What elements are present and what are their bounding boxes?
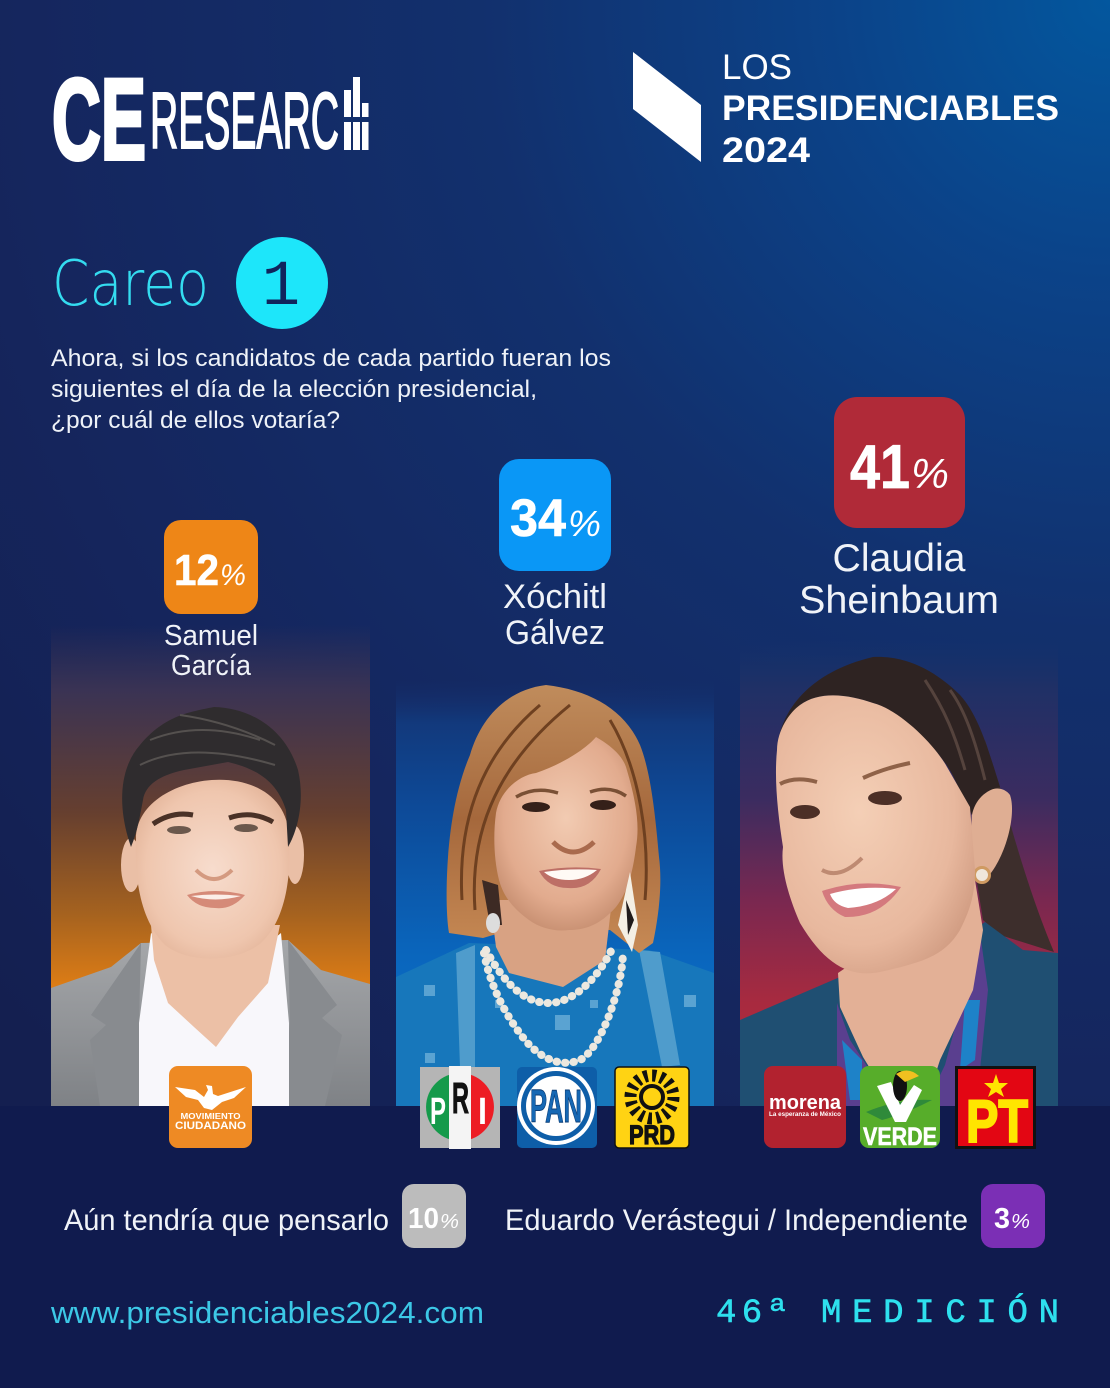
- name: Samuel García: García: [171, 650, 252, 682]
- name: Xóchitl Gálvez: Gálvez: [505, 614, 605, 652]
- logo: CE Research: CE: [52, 56, 146, 184]
- logo: Verde: [860, 1066, 940, 1151]
- name: Claudia Sheinbaum: [799, 537, 999, 622]
- question text: ¿por cuál de ellos votaría?: [51, 407, 340, 434]
- logo wordmark: PRESIDENCIABLES: [722, 89, 1059, 128]
- text: Eduardo Verástegui / Independiente: Eduardo Verástegui / Independiente: [505, 1204, 968, 1237]
- logo: PRI: P: [430, 1091, 446, 1133]
- question text: [51, 345, 611, 434]
- neck: [151, 925, 280, 1047]
- scarf: [837, 933, 988, 1106]
- badge: 34%: [499, 459, 611, 571]
- face: [494, 737, 638, 931]
- badge: 34%: %: [568, 503, 601, 544]
- earrings: [482, 880, 502, 925]
- footer: website: www.presidenciables2024.com: [50, 1295, 484, 1330]
- text: Aún tendría que pensarlo: Aún tendría que pensarlo: [64, 1204, 389, 1237]
- logo: Morena: La esperanza de México: [769, 1111, 841, 1118]
- logo: PT: [955, 1066, 1036, 1155]
- logo: CE Research: [52, 56, 370, 184]
- badge: 41%: [834, 397, 965, 528]
- footer: measurement: MEDICIÓN: [821, 1294, 1059, 1333]
- logo: Morena: [764, 1066, 846, 1148]
- neck and chest: [838, 880, 983, 1068]
- logo: PAN: [517, 1067, 597, 1148]
- name: Claudia Sheinbaum: Claudia: [832, 537, 966, 580]
- name: Samuel García: Samuel: [164, 620, 258, 652]
- name: Samuel García: [164, 620, 258, 682]
- logo: Movimiento Ciudadano: MOVIMIENTO: [180, 1111, 241, 1121]
- badge: 10%: %: [440, 1211, 459, 1233]
- pearl necklaces: [484, 947, 623, 1063]
- logo wordmark: [722, 48, 1059, 170]
- features: [516, 789, 626, 797]
- face: [136, 780, 289, 959]
- name: Xóchitl Gálvez: [503, 578, 607, 652]
- footer: measurement: [716, 1294, 1059, 1333]
- face: [776, 695, 975, 973]
- logo: PRI: I: [478, 1091, 487, 1133]
- badge: 10%: [402, 1184, 466, 1248]
- badge: 12%: [164, 520, 258, 614]
- badge: number 1: 1: [262, 252, 300, 324]
- badge: 10%: 10: [408, 1203, 439, 1235]
- jacket: [51, 940, 370, 1106]
- logo: Verde: VERDE: [863, 1123, 937, 1151]
- heading: Careo: Careo: [52, 247, 209, 320]
- name: Xóchitl Gálvez: Xóchitl: [503, 578, 607, 616]
- logo wordmark: LOS: [722, 48, 792, 87]
- logo: Los Presidenciables 2024: [633, 48, 1059, 170]
- ear: [972, 788, 1012, 874]
- badge: number 1: [236, 237, 328, 329]
- bottom band: [0, 1106, 1110, 1388]
- logo: CE Research: RESEARC: [150, 76, 339, 165]
- neck: [490, 900, 612, 987]
- hair: [122, 707, 301, 847]
- earring: [974, 868, 990, 882]
- hair: [447, 685, 660, 953]
- badge: 3%: %: [1011, 1211, 1030, 1233]
- shirt: [139, 933, 289, 1106]
- hair top: [777, 657, 1000, 815]
- logo: Morena: morena: [769, 1092, 842, 1114]
- logo wordmark: 2024: [722, 131, 811, 170]
- badge: 3%: 3: [994, 1203, 1010, 1235]
- name: Claudia Sheinbaum: Sheinbaum: [799, 579, 999, 622]
- features: [780, 763, 910, 784]
- icon: white chevron mark: [633, 52, 701, 162]
- eyes and mouth: [153, 814, 273, 824]
- logo: PT: PT: [966, 1088, 1028, 1155]
- footer: measurement: 46ª: [716, 1295, 788, 1333]
- jacket: [740, 922, 1058, 1106]
- logo: PRD: PRD: [629, 1120, 675, 1150]
- panel: Claudia Sheinbaum photo: [740, 640, 1058, 1106]
- logo: PRI: [420, 1066, 500, 1149]
- panel: Xóchitl Gálvez photo: [396, 680, 714, 1106]
- question text: siguientes el día de la elección presidencial,: [51, 376, 537, 403]
- badge: 41%: %: [911, 450, 949, 497]
- logo: PRD: [615, 1067, 689, 1150]
- badge: 41%: 41: [850, 433, 910, 502]
- badge: 34%: 34: [510, 489, 566, 548]
- ears: [121, 839, 138, 892]
- badge: 12%: 12: [174, 546, 219, 595]
- badge: 12%: %: [220, 559, 246, 592]
- logo: Movimiento Ciudadano: [169, 1066, 252, 1148]
- logo: PRI: R: [452, 1074, 469, 1123]
- logo: PAN: PAN: [530, 1080, 582, 1132]
- ponytail: [975, 740, 1054, 952]
- logo: Movimiento Ciudadano: CIUDADANO: [175, 1120, 246, 1132]
- question text: Ahora, si los candidatos de cada partido fueran los: [51, 345, 611, 372]
- blouse: [396, 943, 714, 1106]
- panel: Samuel García photo: [51, 625, 370, 1106]
- badge: 3%: [981, 1184, 1045, 1248]
